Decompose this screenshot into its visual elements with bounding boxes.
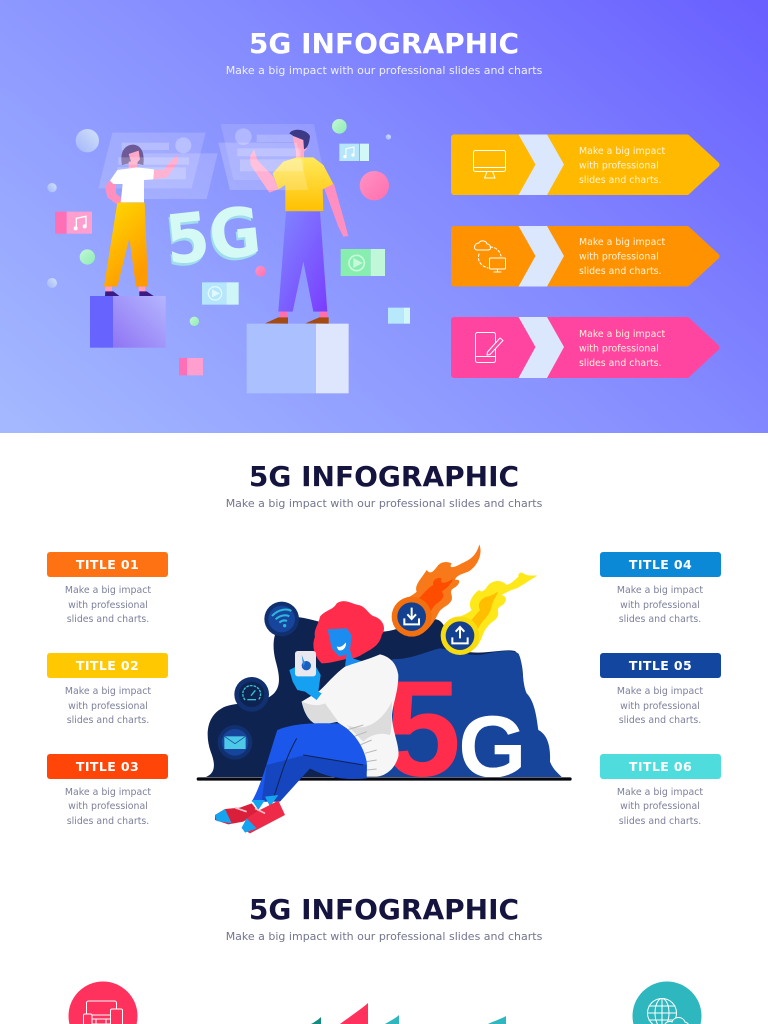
person: man	[250, 130, 348, 324]
card text: slides and charts.	[579, 358, 662, 369]
icon: cloud to monitor	[475, 241, 506, 272]
item: title 04: slides and charts.	[619, 614, 701, 625]
arrow card 1	[454, 134, 716, 195]
tile: pale blue right	[388, 308, 410, 324]
icon: monitor	[474, 150, 506, 178]
chart fins: partially visible	[311, 1003, 506, 1024]
shoes	[215, 803, 258, 824]
item: title 03	[47, 754, 168, 827]
item: title 04: TITLE 04	[629, 557, 692, 572]
dark backdrop	[206, 617, 523, 777]
icon: mail badge	[218, 725, 252, 760]
item: title 01: TITLE 01	[76, 557, 139, 572]
item: title 01: with professional	[68, 600, 148, 611]
item: title 04: with professional	[620, 600, 700, 611]
card body	[454, 138, 716, 192]
icon: speedometer badge	[234, 677, 269, 712]
card text: with professional	[579, 344, 659, 354]
icon: video tile blue	[202, 282, 239, 305]
card text: with professional	[579, 252, 659, 262]
hair	[313, 601, 384, 663]
item: title 01: slides and charts.	[67, 614, 149, 625]
item: title 06: TITLE 06	[629, 759, 692, 774]
holographic panel over man	[218, 143, 308, 190]
sweater	[302, 654, 399, 777]
arrow card 3	[454, 317, 716, 378]
title: section two: 5G INFOGRAPHIC	[249, 460, 519, 493]
item: title 05: TITLE 05	[629, 658, 692, 673]
card body	[454, 320, 716, 375]
item: title 03: slides and charts.	[67, 816, 149, 827]
5G lettering: G	[458, 697, 526, 795]
title: section three: 5G INFOGRAPHIC	[249, 893, 519, 926]
icon: tablet and pen	[476, 332, 503, 362]
card text: Make a big impact	[579, 146, 665, 157]
ground line	[197, 777, 572, 781]
subtitle: section two: Make a big impact with our professional slides and charts	[226, 497, 543, 510]
item: title 01	[47, 552, 168, 625]
phone and hand	[289, 663, 322, 700]
trousers	[252, 723, 367, 802]
face and neck	[328, 628, 363, 674]
icon: music tile blue	[339, 144, 369, 161]
blue backdrop	[363, 648, 562, 777]
item: title 02	[47, 653, 168, 726]
item: title 05: slides and charts.	[619, 715, 701, 726]
item: title 06	[600, 754, 721, 827]
item: title 04: Make a big impact	[617, 585, 703, 596]
item: title 03: Make a big impact	[65, 787, 151, 798]
item: title 03: with professional	[68, 801, 148, 812]
item: title 02: with professional	[68, 701, 148, 712]
decorative dots	[47, 119, 391, 326]
illustration: woman with phone and 5G	[197, 544, 572, 833]
item: title 01: Make a big impact	[65, 585, 151, 596]
item: title 06: Make a big impact	[617, 787, 703, 798]
5G 3D lettering: 5G	[162, 192, 265, 281]
ankles	[252, 795, 278, 810]
item: title 06: slides and charts.	[619, 816, 701, 827]
person: woman	[104, 145, 178, 296]
card text: with professional	[579, 160, 659, 172]
card text: Make a big impact	[579, 237, 665, 248]
illustration: two people and 5G	[47, 119, 410, 393]
fire meteor: upload	[441, 573, 537, 655]
person: reclining woman	[215, 601, 399, 833]
subtitle: hero: Make a big impact with our professional slides and charts	[226, 64, 543, 77]
5G lettering: 5	[385, 652, 461, 805]
icon: video tile green	[341, 249, 385, 276]
icon: wifi badge	[264, 602, 299, 636]
arrow card 2	[454, 226, 716, 286]
chevron	[518, 134, 564, 195]
chevron	[518, 226, 564, 286]
left podium	[90, 296, 166, 348]
item: title 05	[600, 653, 721, 726]
item: title 02: Make a big impact	[65, 686, 151, 697]
right podium	[247, 324, 349, 393]
badge: globe and cloud icon	[632, 982, 702, 1024]
item: title 02: slides and charts.	[67, 715, 149, 726]
fire meteor: download	[392, 544, 481, 637]
badge: devices icon	[68, 982, 138, 1024]
item: title 04	[600, 552, 721, 625]
card body	[454, 229, 716, 284]
card text: slides and charts.	[579, 266, 662, 277]
5G 3D lettering: 5G	[160, 195, 263, 283]
holographic panels back	[98, 124, 325, 199]
5G lettering	[385, 652, 526, 805]
subtitle: section three: Make a big impact with our professional slides and charts	[226, 930, 543, 943]
item: title 06: with professional	[620, 801, 700, 812]
card text: Make a big impact	[579, 329, 665, 340]
item: title 05: with professional	[620, 701, 700, 712]
tile: pink bottom	[179, 358, 203, 375]
title: hero: 5G INFOGRAPHIC	[249, 27, 519, 60]
item: title 03: TITLE 03	[76, 759, 139, 774]
card text: slides and charts.	[579, 175, 662, 186]
chevron	[518, 317, 564, 378]
icon: music tile pink	[55, 212, 92, 234]
holographic bars over woman	[117, 157, 189, 179]
sweater ribbing	[347, 725, 377, 770]
item: title 02: TITLE 02	[76, 658, 139, 673]
hero background	[0, 0, 768, 433]
item: title 05: Make a big impact	[617, 686, 703, 697]
